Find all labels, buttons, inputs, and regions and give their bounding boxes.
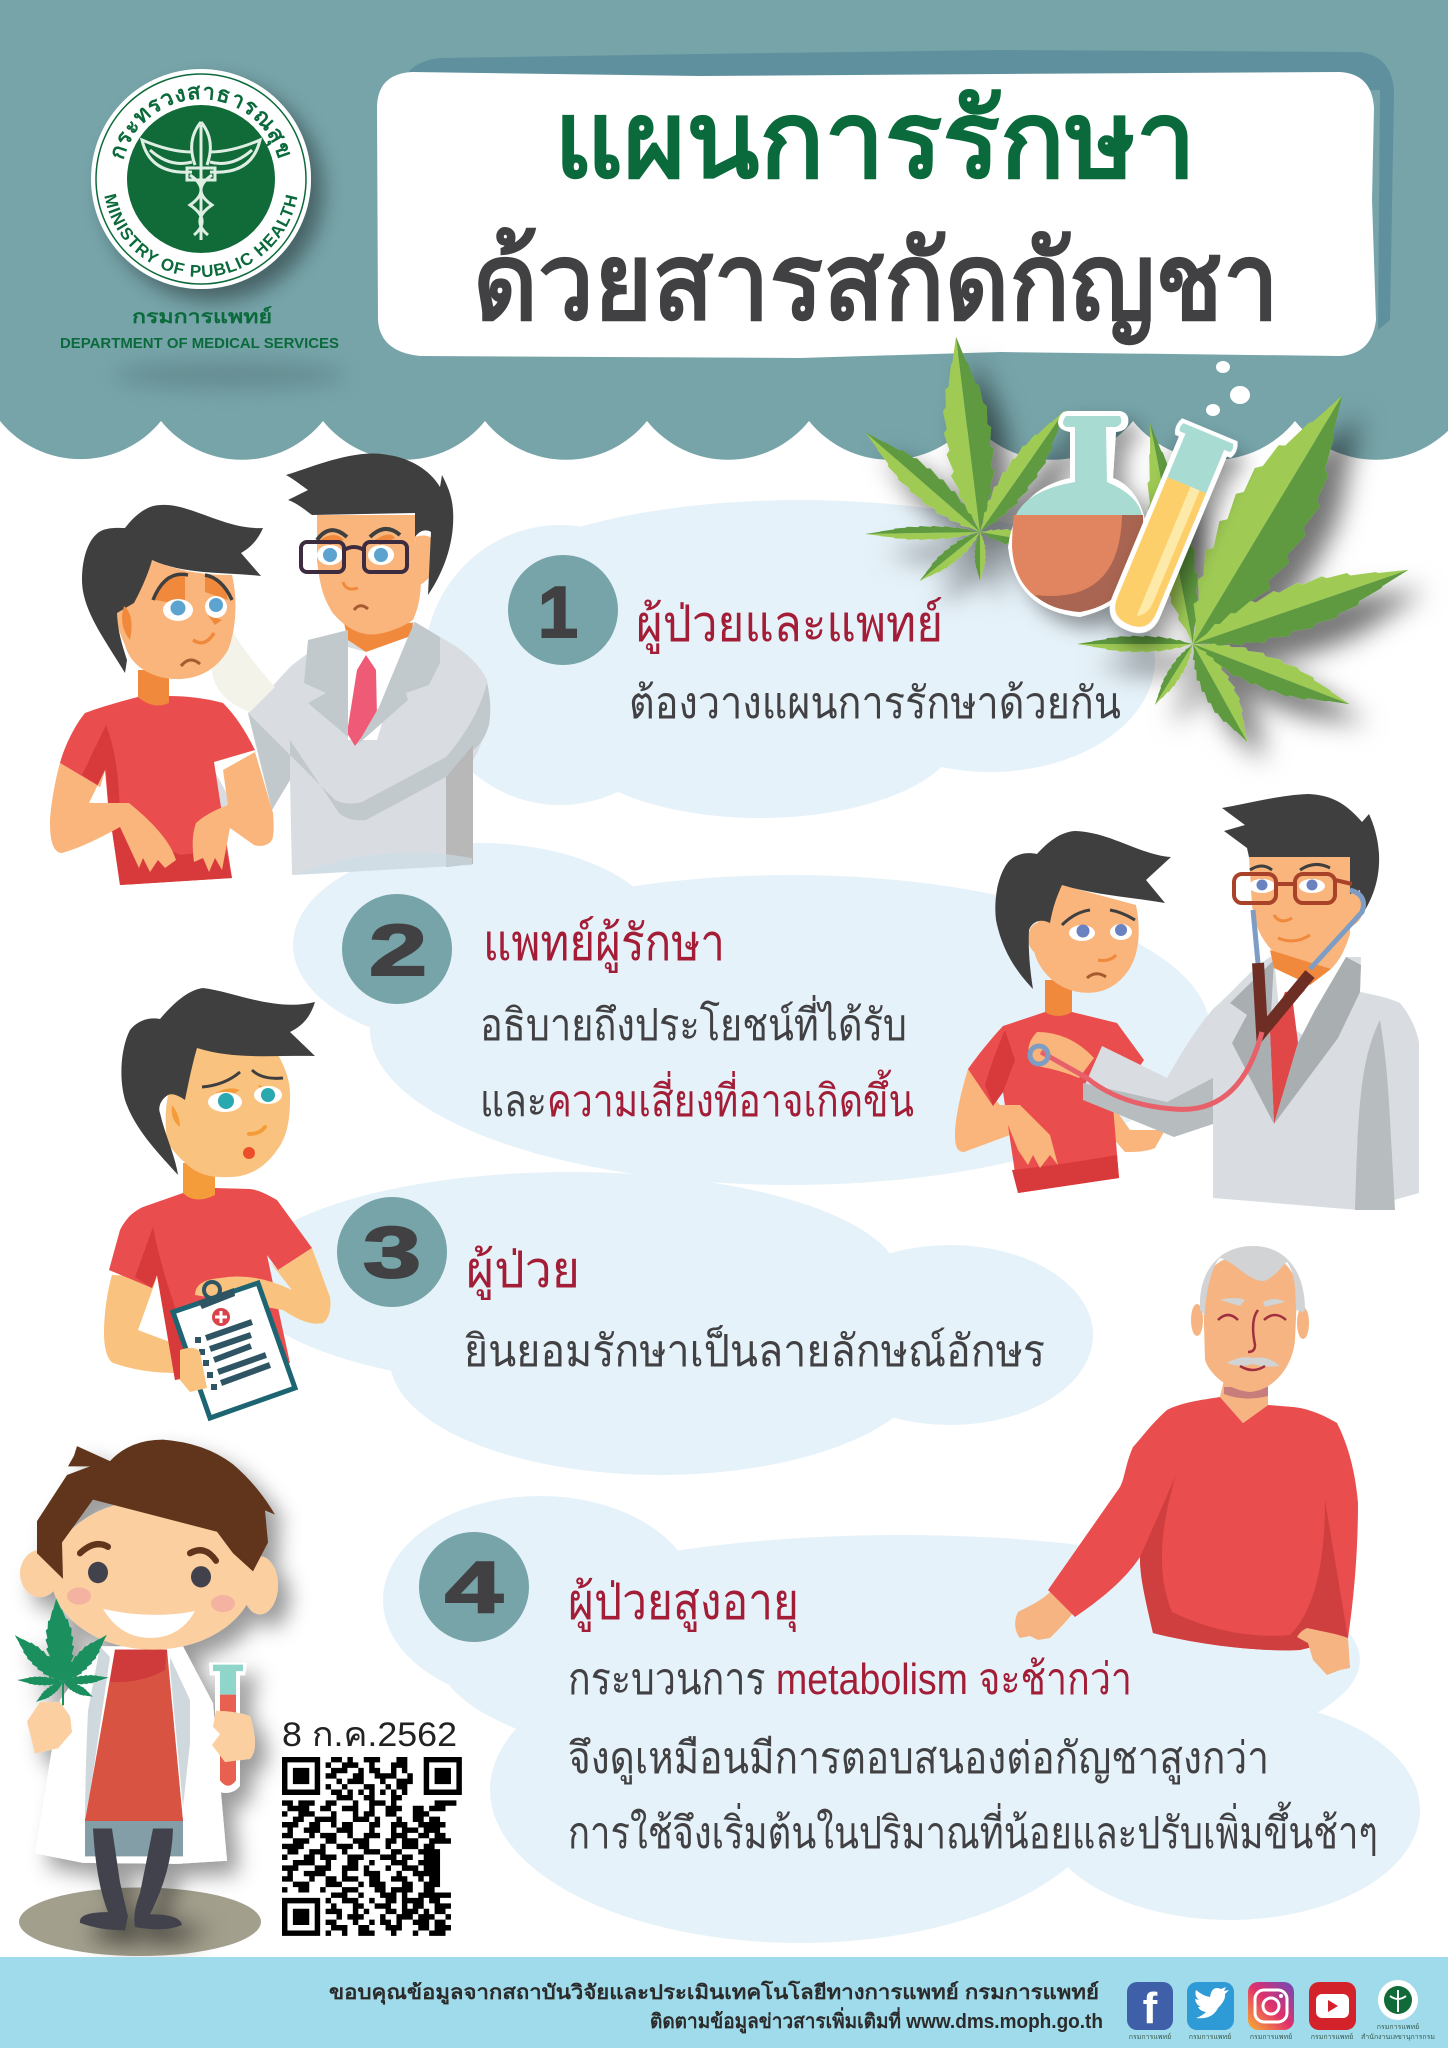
step 3 text: ผู้ป่วย xyxy=(466,1242,580,1300)
icon: instagram: กรมการแพทย์ xyxy=(1250,2033,1292,2041)
department name: กรมการแพทย์ xyxy=(132,306,272,328)
icon: facebook xyxy=(1127,1982,1173,2041)
icon: department logo xyxy=(1361,1980,1435,2041)
logo: ministry of public health: กระทรวงสาธารณสุข xyxy=(112,85,290,160)
test tube xyxy=(209,1662,247,1793)
qr code xyxy=(282,1757,462,1936)
number badge 2: 2 xyxy=(369,911,427,991)
step 4 text xyxy=(568,1574,1378,1858)
logo: ministry of public health: DEPARTMENT OF MEDICAL SERVICES xyxy=(60,335,339,352)
step 2 text xyxy=(480,915,914,1126)
flask xyxy=(1008,411,1148,617)
step 1 text: ผู้ป่วยและแพทย์ xyxy=(636,596,943,654)
step 2 text: แพทย์ผู้รักษา xyxy=(483,915,725,973)
step 3 text: ยินยอมรักษาเป็นลายลักษณ์อักษร xyxy=(464,1325,1045,1376)
small leaf xyxy=(855,334,1079,587)
bubbles xyxy=(1206,361,1250,416)
cloud 1 xyxy=(424,500,1155,818)
footer text: ติดตามข้อมูลข่าวสารเพิ่มเติมที่ www.dms.moph.go.th xyxy=(650,2006,1103,2035)
lab coat xyxy=(35,1646,227,1864)
cloud 3 xyxy=(240,1172,1093,1475)
patient shirt xyxy=(60,696,255,885)
patient arms and hands xyxy=(50,763,176,872)
patient neck and head xyxy=(138,670,169,705)
step 4 text: กระบวนการ metabolism จะช้ากว่า xyxy=(568,1655,1132,1704)
footer text xyxy=(329,1980,1103,2035)
icon: youtube: กรมการแพทย์ xyxy=(1311,2033,1353,2041)
shirt xyxy=(85,1650,183,1821)
illustration: doctor with stethoscope and patient xyxy=(955,794,1419,1210)
icon: youtube xyxy=(1309,1982,1356,2041)
step 1 text xyxy=(629,596,1121,728)
illustration: cartoon doctor with leaf and tube xyxy=(9,1440,278,1956)
test tube xyxy=(1096,417,1240,643)
icon: facebook: f xyxy=(1143,1984,1158,2033)
footer band xyxy=(0,1957,1448,2048)
logo: ministry of public health xyxy=(60,69,339,394)
ground shadow xyxy=(19,1887,261,1956)
step 2 text: และความเสี่ยงที่อาจเกิดขึ้น xyxy=(480,1069,914,1126)
step 4 text: ผู้ป่วยสูงอายุ xyxy=(568,1574,799,1632)
header band with scalloped edge xyxy=(0,0,1448,460)
clipboard xyxy=(173,1282,295,1418)
illustration: patient with consent clipboard xyxy=(104,988,331,1418)
doctor coat xyxy=(1083,957,1419,1210)
title line 1: แผนการรักษา xyxy=(554,79,1196,200)
number badge 4: 4 xyxy=(445,1548,503,1628)
icon: department logo: กรมการแพทย์ xyxy=(1377,2023,1419,2031)
step 2 text: อธิบายถึงประโยชน์ที่ได้รับ xyxy=(480,994,907,1050)
illustration: cannabis leaves with flask and test tube xyxy=(855,334,1416,749)
title line 2: ด้วยสารสกัดกัญชา xyxy=(473,221,1279,346)
cloud 4 xyxy=(383,1496,1420,1943)
icon: facebook: กรมการแพทย์ xyxy=(1129,2033,1171,2041)
patient shirt xyxy=(968,1012,1144,1193)
number badge 2 xyxy=(342,894,452,1004)
step 3 text xyxy=(464,1242,1045,1376)
doctor head xyxy=(1249,857,1350,971)
date: 8 ก.ค.2562 xyxy=(282,1716,457,1754)
footer text: ขอบคุณข้อมูลจากสถาบันวิจัยและประเมินเทคโนโลยีทางการแพทย์ กรมการแพทย์ xyxy=(329,1980,1099,2006)
cloud 2 xyxy=(293,843,1210,1185)
head xyxy=(20,1550,60,1597)
number badge 1 xyxy=(508,555,618,665)
patient neck, head and hair xyxy=(1045,980,1072,1016)
leaf xyxy=(42,1597,77,1683)
doctor head xyxy=(317,515,421,634)
illustration: doctor examining patient eye xyxy=(50,454,490,885)
icon: instagram xyxy=(1248,1982,1294,2041)
step 1 text: ต้องวางแผนการรักษาด้วยกัน xyxy=(629,679,1121,728)
step 4 text: จึงดูเหมือนมีการตอบสนองต่อกัญชาสูงกว่า xyxy=(568,1734,1269,1785)
illustration: elderly patient xyxy=(1015,1246,1358,1675)
doctor coat xyxy=(248,622,490,875)
big leaf xyxy=(1077,375,1416,749)
logo: ministry of public health: MINISTRY OF PUBLIC HEALTH xyxy=(104,194,298,277)
shorts and legs xyxy=(85,1818,183,1856)
number badge 1: 1 xyxy=(538,573,578,653)
number badge 4 xyxy=(419,1532,529,1642)
stethoscope xyxy=(1030,890,1364,1109)
title box xyxy=(377,50,1394,358)
number badge 3: 3 xyxy=(363,1213,421,1293)
icon: department logo: สำนักงานเลขานุการกรม xyxy=(1361,2033,1435,2041)
icon: twitter: กรมการแพทย์ xyxy=(1189,2033,1231,2041)
patient arms xyxy=(955,1069,1058,1168)
icon: twitter xyxy=(1187,1982,1234,2041)
number badge 3 xyxy=(337,1197,447,1307)
